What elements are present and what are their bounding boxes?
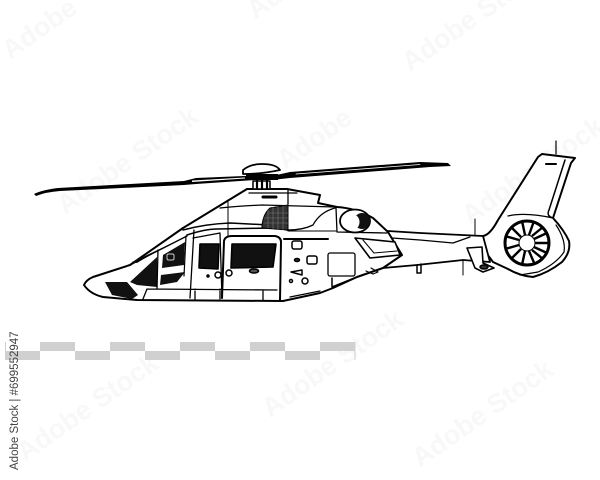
tail boom — [383, 219, 490, 275]
crew door — [193, 233, 222, 298]
fuselage outline — [84, 189, 402, 301]
cockpit glazing — [132, 236, 187, 263]
helicopter side view — [34, 141, 575, 301]
stock id caption: Adobe Stock | #699552947 — [9, 331, 21, 470]
rear cabin details — [292, 241, 302, 249]
engine side panel — [355, 238, 400, 258]
main rotor — [34, 162, 451, 196]
watermark pattern: Adobe Stock — [11, 347, 164, 467]
lower skirt panels — [143, 289, 320, 300]
watermark pattern: Adobe Stock — [256, 303, 409, 423]
intake grille — [262, 205, 288, 230]
roof and cowl lines — [183, 223, 270, 230]
watermark pattern: Adobe — [271, 102, 357, 175]
access hatch — [328, 253, 355, 276]
watermark pattern: Adobe Stock — [51, 100, 204, 220]
tail skid — [467, 247, 494, 272]
scale bar — [5, 342, 356, 360]
engine exhaust — [340, 210, 370, 232]
cabin door — [222, 236, 281, 300]
tail fin and fan shroud — [483, 141, 575, 277]
watermark pattern: Adobe Stock — [406, 353, 559, 473]
ducted fan — [505, 221, 549, 265]
